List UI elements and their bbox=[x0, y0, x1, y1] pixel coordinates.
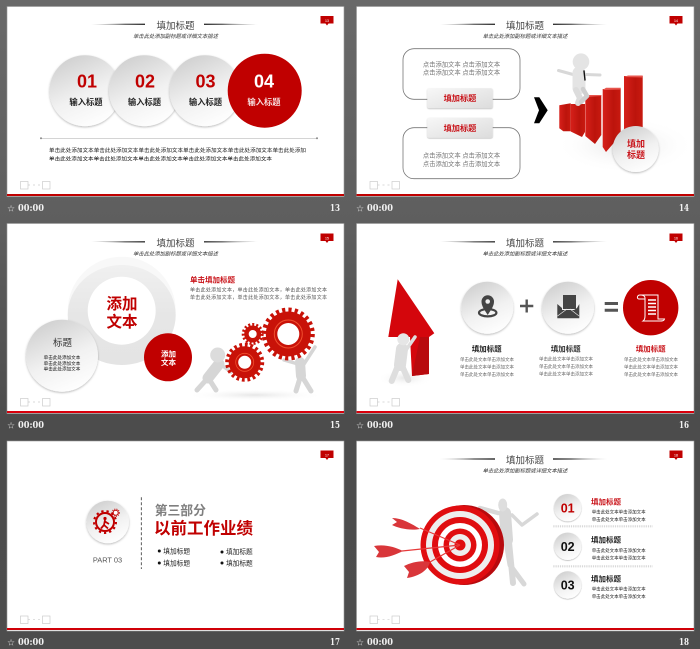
caption 3: 单击此处文本单击添加文本 bbox=[624, 356, 678, 363]
upper text box: 点击添加文本 点击添加文本 bbox=[423, 59, 501, 68]
footer time bbox=[7, 638, 44, 648]
bottom red bar bbox=[356, 628, 694, 630]
part label: PART 03 bbox=[93, 556, 122, 565]
lower text box bbox=[403, 118, 520, 179]
item 3: 03 bbox=[561, 579, 575, 593]
heading: 填加标题 bbox=[506, 238, 544, 250]
wave divider bbox=[553, 565, 653, 567]
circle label: 填加 bbox=[627, 138, 645, 149]
page badge bbox=[320, 16, 334, 26]
heading: 填加标题 bbox=[156, 20, 195, 32]
footer time: ☆ bbox=[7, 638, 15, 648]
page badge bbox=[320, 450, 334, 460]
dashed divider bbox=[140, 497, 142, 569]
item 3: 单击此处文本单击添加文本 bbox=[592, 593, 646, 600]
body text: 单击此处添加文本单击此处添加文本单击此处添加文本单击此处添加文本单击此处添加文本 bbox=[49, 154, 273, 162]
gears illustration bbox=[185, 310, 325, 401]
slide panel bbox=[7, 6, 344, 196]
figure on bars bbox=[558, 53, 600, 103]
circle 03: 03 bbox=[195, 72, 216, 92]
page badge: 14 bbox=[674, 19, 678, 23]
circle 02: 02 bbox=[135, 72, 155, 92]
text block: 单击填加标题 bbox=[190, 274, 235, 284]
right figure bbox=[284, 347, 315, 391]
slide number: 17 bbox=[330, 638, 340, 648]
arrow top bbox=[392, 518, 460, 545]
heading: 单击此处添加副标题或详细文本描述 bbox=[483, 468, 568, 474]
left figure bbox=[197, 348, 231, 390]
left circle: 单击此处添加文本 bbox=[44, 366, 81, 373]
footer time: ☆ bbox=[356, 422, 364, 432]
slide 13 bbox=[7, 6, 344, 214]
section heading: 第三部分 bbox=[155, 503, 206, 518]
circle 04 bbox=[228, 54, 302, 128]
bottom red bar bbox=[356, 194, 694, 196]
page badge bbox=[670, 16, 682, 26]
bar chart illustration bbox=[555, 76, 695, 173]
footer time: 00:00 bbox=[367, 204, 393, 214]
heading bbox=[91, 20, 258, 40]
slide panel bbox=[7, 224, 344, 414]
circle 02 bbox=[109, 55, 180, 126]
footer time bbox=[356, 204, 393, 214]
red arrow with figure bbox=[377, 279, 434, 387]
circle label: 标题 bbox=[627, 149, 645, 160]
divider line bbox=[40, 137, 318, 139]
circle 03: 输入标题 bbox=[189, 97, 223, 107]
caption 2: 单击此处文本单击添加文本 bbox=[539, 370, 593, 377]
nav icon bbox=[370, 616, 400, 624]
caption 3: 填加标题 bbox=[636, 344, 666, 354]
item 2 bbox=[554, 533, 646, 562]
caption 3: 单击此处文本单击添加文本 bbox=[624, 371, 678, 378]
caption 3: 单击此处文本单击添加文本 bbox=[624, 364, 678, 371]
page badge: 13 bbox=[325, 19, 329, 23]
heading: 填加标题 bbox=[506, 20, 544, 32]
upper text box bbox=[403, 49, 520, 108]
caption 1: 单击此处文本单击添加文本 bbox=[460, 371, 514, 378]
circle label bbox=[613, 126, 659, 172]
slide 18 bbox=[356, 441, 694, 648]
arrow middle bbox=[374, 545, 460, 558]
red circle: 添加 bbox=[161, 348, 176, 358]
large gear bbox=[264, 310, 312, 358]
arrow bottom bbox=[404, 545, 460, 578]
text block: 单击此处添加文本，单击此处添加文本，单击此处添加文本 bbox=[190, 294, 327, 301]
circle 01: 输入标题 bbox=[69, 97, 103, 107]
heading bbox=[440, 454, 607, 474]
body text bbox=[49, 146, 306, 162]
circle 02: 输入标题 bbox=[128, 97, 162, 107]
footer time: ☆ bbox=[7, 422, 15, 432]
item 2: 单击此处文本单击添加文本 bbox=[592, 554, 646, 562]
bottom red bar bbox=[7, 194, 344, 196]
page badge: 15 bbox=[325, 236, 329, 240]
lower text box: 点击添加文本 点击添加文本 bbox=[423, 150, 501, 160]
footer time bbox=[7, 421, 44, 432]
circle: scroll icon bbox=[623, 280, 678, 335]
page badge: 18 bbox=[674, 454, 678, 458]
part circle bbox=[86, 501, 129, 543]
page badge: 17 bbox=[325, 454, 329, 458]
red circle: 文本 bbox=[161, 357, 176, 367]
slide 17 bbox=[7, 441, 344, 648]
left circle bbox=[26, 320, 98, 392]
item 1: 01 bbox=[561, 501, 575, 515]
bullet list bbox=[158, 546, 253, 568]
left circle: 单击此处添加文本 bbox=[44, 354, 81, 361]
item 1: 填加标题 bbox=[591, 496, 621, 506]
heading: 单击此处添加副标题或详细文本描述 bbox=[133, 250, 219, 258]
item 1: 单击此处文本单击添加文本 bbox=[592, 516, 646, 523]
caption 1: 单击此处文本单击添加文本 bbox=[460, 356, 514, 363]
nav icon bbox=[20, 616, 50, 624]
footer time: ☆ bbox=[356, 638, 364, 648]
circle: pin icon bbox=[461, 282, 513, 334]
footer time: 00:00 bbox=[18, 421, 44, 431]
figure bbox=[480, 498, 537, 584]
slide panel bbox=[7, 441, 344, 631]
heading bbox=[440, 238, 607, 258]
medium gear bbox=[227, 345, 262, 380]
page badge bbox=[320, 234, 334, 243]
heading: 单击此处添加副标题或详细文本描述 bbox=[483, 250, 568, 258]
plus sign bbox=[520, 300, 533, 312]
bullet list: 填加标题 bbox=[226, 547, 253, 556]
icon: chevron arrow bbox=[534, 97, 548, 123]
red circle bbox=[144, 333, 192, 381]
slide number: 18 bbox=[679, 638, 689, 648]
text block bbox=[190, 274, 327, 301]
section heading: 以前工作业绩 bbox=[154, 519, 254, 538]
footer time bbox=[356, 421, 393, 432]
circle 04: 输入标题 bbox=[247, 97, 281, 107]
left circle: 标题 bbox=[53, 337, 72, 349]
slide number: 16 bbox=[679, 421, 689, 431]
item 1 bbox=[554, 494, 646, 523]
slide panel bbox=[356, 224, 694, 414]
ring with centre text bbox=[68, 257, 176, 365]
circle 04: 04 bbox=[254, 72, 274, 92]
bottom red bar bbox=[7, 628, 344, 630]
lower text box: 点击添加文本 点击添加文本 bbox=[423, 159, 501, 168]
small gear bbox=[243, 324, 262, 344]
nav icon bbox=[370, 398, 400, 406]
circle: mail icon bbox=[542, 282, 594, 334]
figure bbox=[392, 333, 415, 381]
slide panel bbox=[356, 6, 694, 196]
page badge bbox=[670, 234, 682, 243]
slide number: 13 bbox=[330, 204, 340, 214]
bottom red bar bbox=[7, 411, 344, 413]
item 2: 填加标题 bbox=[591, 535, 621, 545]
icon: scroll bbox=[637, 295, 664, 321]
page badge bbox=[670, 450, 682, 460]
bullet list: 填加标题 bbox=[163, 546, 190, 556]
caption 1: 填加标题 bbox=[472, 344, 502, 354]
caption 1: 单击此处文本单击添加文本 bbox=[460, 364, 514, 371]
slide number: 14 bbox=[679, 204, 689, 214]
caption 2 bbox=[539, 344, 593, 377]
heading: 单击此处添加副标题或详细文本描述 bbox=[133, 33, 219, 40]
heading: 填加标题 bbox=[506, 454, 544, 466]
footer time bbox=[7, 204, 44, 214]
left circle: 单击此处添加文本 bbox=[44, 360, 81, 367]
upper text box: 点击添加文本 点击添加文本 bbox=[423, 68, 501, 77]
item 3: 填加标题 bbox=[591, 573, 621, 583]
slide 16 bbox=[356, 224, 694, 432]
ring with centre text: 添加 bbox=[106, 295, 138, 313]
target illustration bbox=[374, 498, 537, 585]
item 2: 单击此处文本单击添加文本 bbox=[592, 547, 646, 554]
wave divider bbox=[553, 525, 653, 527]
nav icon bbox=[370, 182, 400, 189]
upper label: 填加标题 bbox=[444, 93, 476, 103]
bottom red bar bbox=[356, 411, 694, 413]
equals sign bbox=[605, 304, 618, 310]
page badge: 16 bbox=[674, 236, 678, 240]
nav icon bbox=[20, 182, 50, 189]
body text: 单击此处添加文本单击此处添加文本单击此处添加文本单击此处添加文本单击此处添加文本单击此处添加 bbox=[49, 146, 306, 154]
lower label: 填加标题 bbox=[444, 123, 476, 133]
circle 01 bbox=[50, 55, 120, 126]
text block: 单击此处添加文本，单击此处添加文本，单击此处添加文本 bbox=[190, 286, 327, 293]
icon: map pin bbox=[479, 295, 496, 316]
caption 2: 单击此处文本单击添加文本 bbox=[539, 363, 593, 370]
item 3: 单击此处文本单击添加文本 bbox=[592, 586, 646, 592]
footer time: 00:00 bbox=[18, 204, 44, 214]
caption 2: 填加标题 bbox=[551, 344, 581, 354]
icon: envelope bbox=[557, 295, 579, 318]
nav icon bbox=[20, 398, 50, 406]
slide 14 bbox=[356, 6, 695, 214]
footer time: 00:00 bbox=[367, 421, 393, 431]
item 1: 单击此处文本单击添加文本 bbox=[592, 508, 646, 516]
footer time: ☆ bbox=[356, 204, 364, 214]
item 3 bbox=[554, 571, 646, 600]
caption 1 bbox=[460, 344, 514, 378]
footer time: 00:00 bbox=[367, 638, 393, 648]
slide panel bbox=[356, 441, 694, 631]
footer time: ☆ bbox=[7, 204, 15, 214]
slide 15 bbox=[7, 224, 344, 432]
heading: 填加标题 bbox=[156, 238, 195, 250]
footer time: 00:00 bbox=[18, 638, 44, 648]
caption 2: 单击此处文本单击添加文本 bbox=[539, 355, 593, 362]
heading: 单击此处添加副标题或详细文本描述 bbox=[483, 33, 568, 40]
bullet list: 填加标题 bbox=[226, 558, 253, 568]
heading bbox=[440, 20, 607, 40]
heading bbox=[91, 238, 258, 258]
target bbox=[420, 505, 504, 585]
section heading bbox=[154, 503, 254, 538]
icon: gear with figure bbox=[94, 509, 119, 533]
circle 01: 01 bbox=[77, 72, 97, 92]
slide number: 15 bbox=[330, 421, 340, 431]
caption 3 bbox=[624, 344, 678, 378]
footer time bbox=[356, 638, 393, 648]
circle 03 bbox=[170, 55, 240, 126]
ring with centre text: 文本 bbox=[106, 312, 138, 331]
item 2: 02 bbox=[561, 540, 575, 554]
bullet list: 填加标题 bbox=[163, 558, 190, 568]
